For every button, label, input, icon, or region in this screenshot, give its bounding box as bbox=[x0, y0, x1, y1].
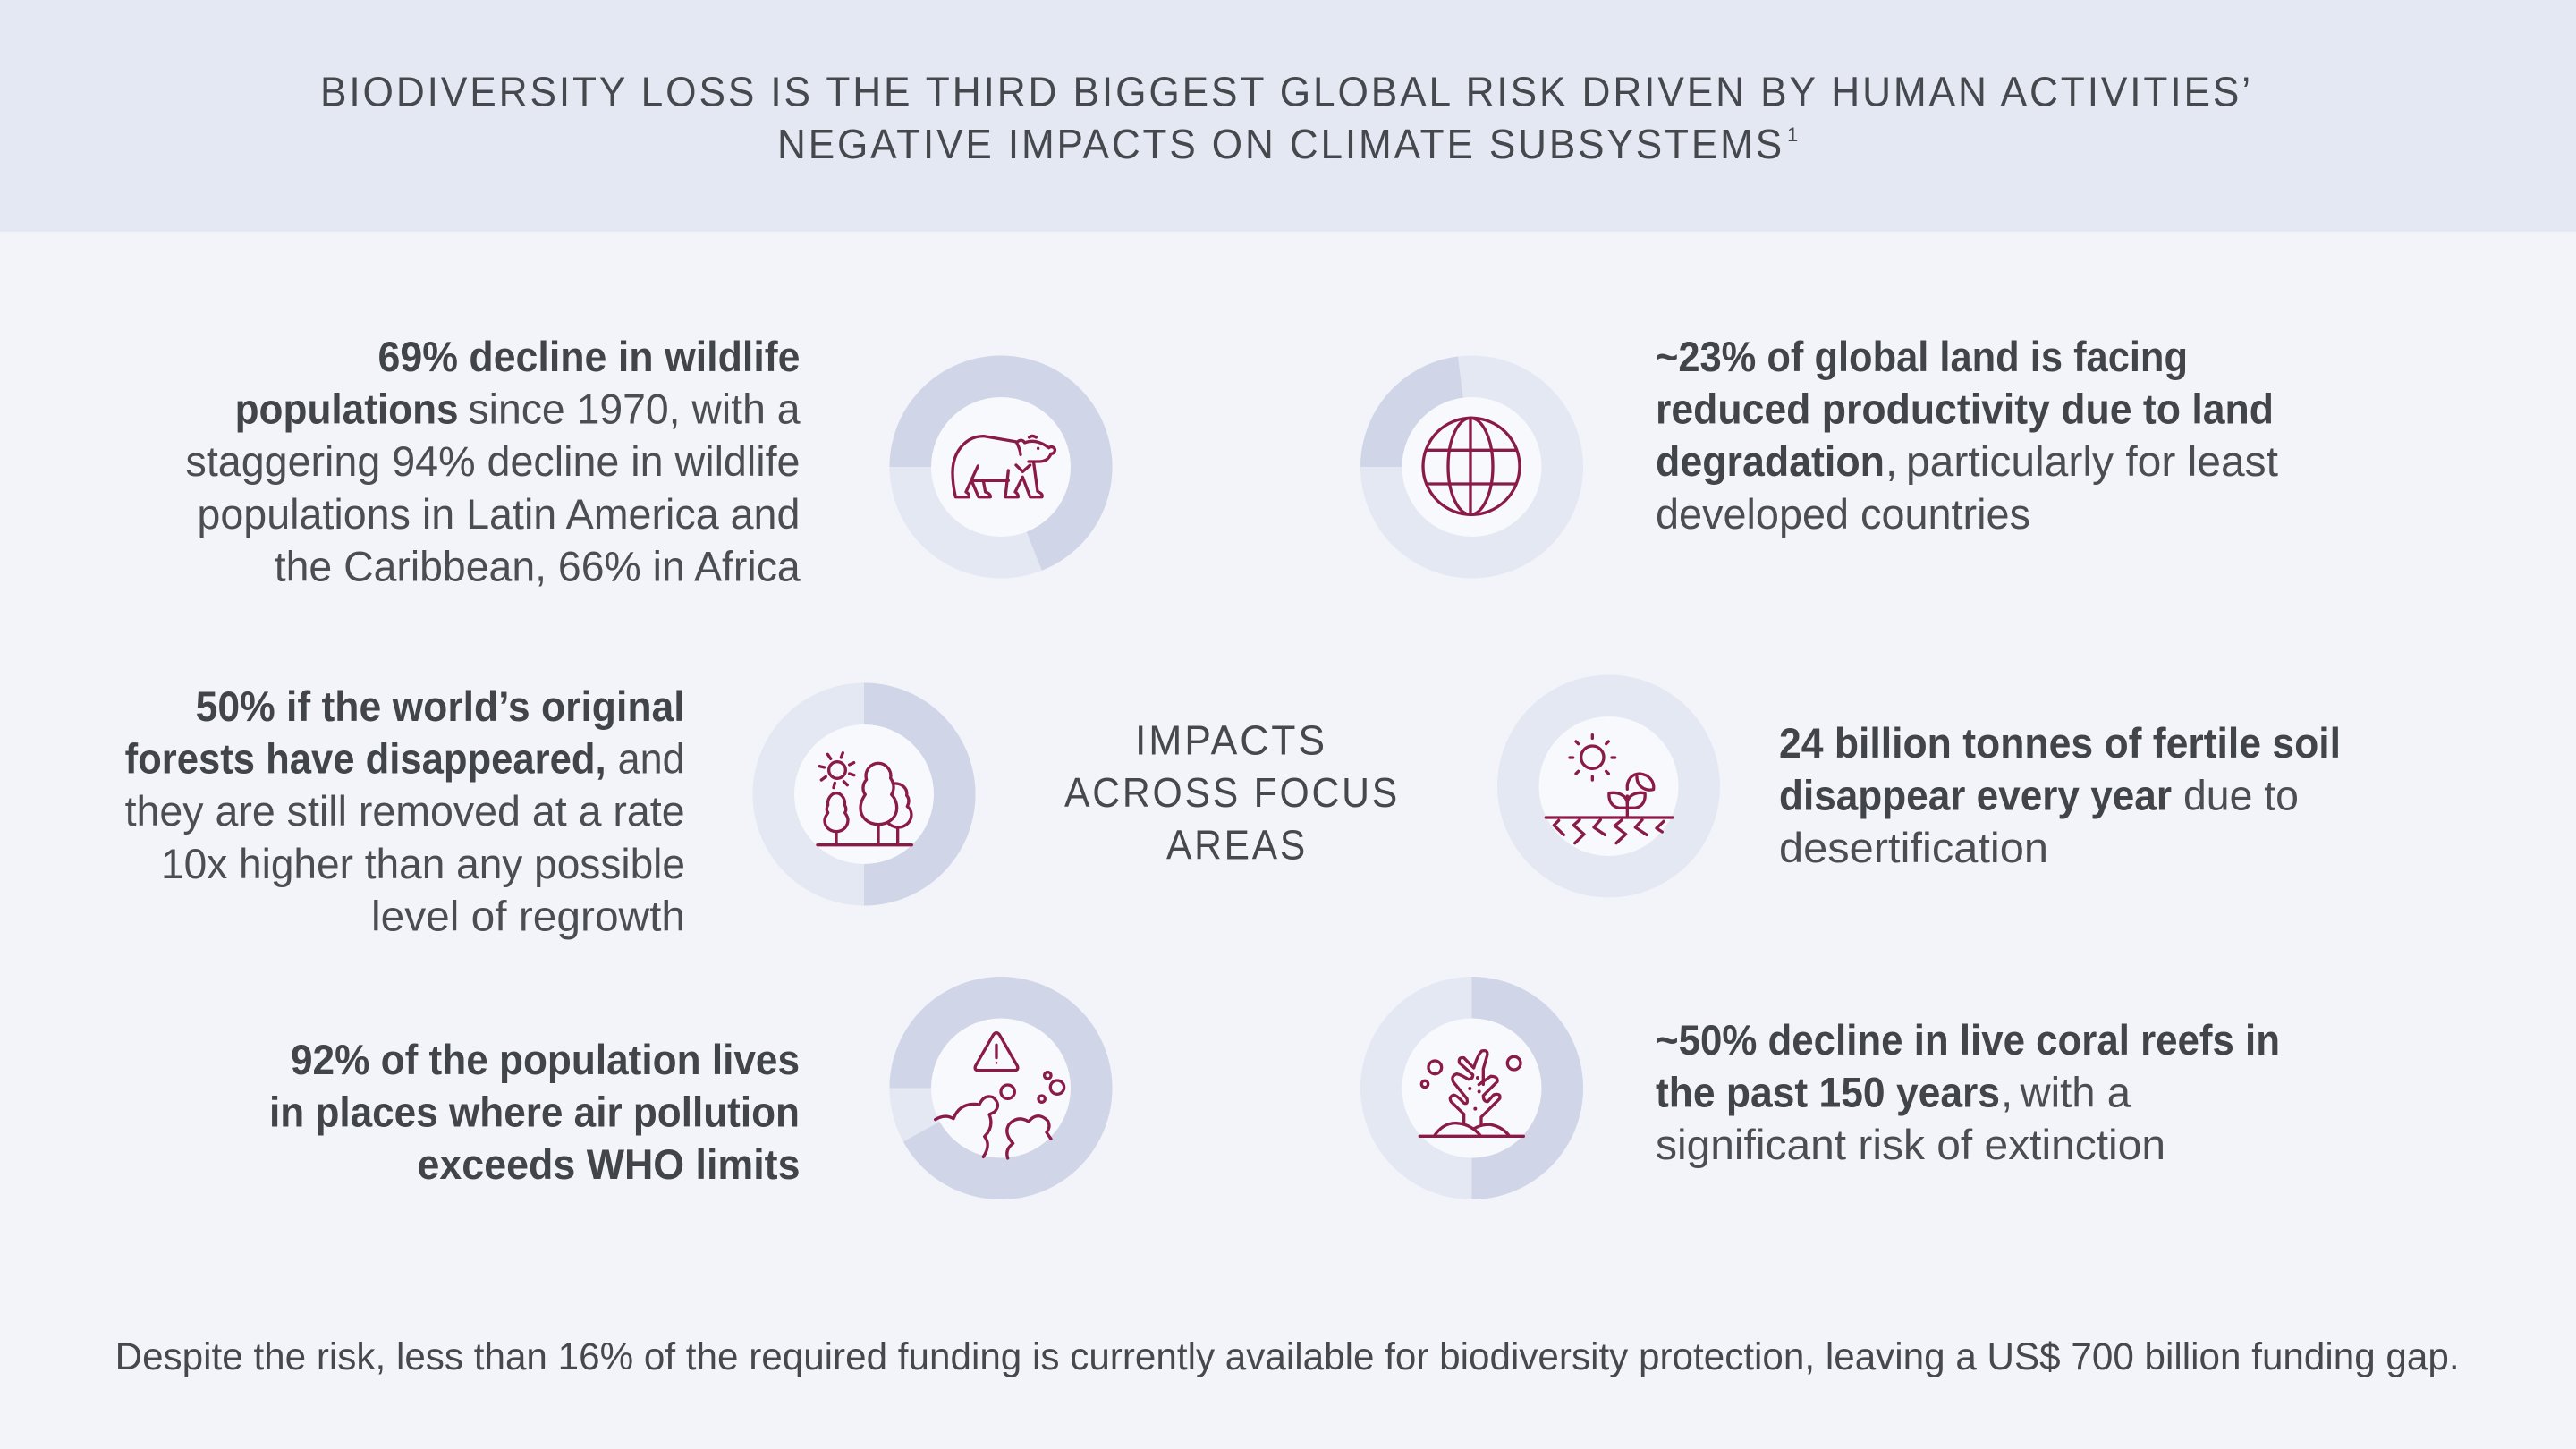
text: coral reefs: ~50% decline in live coral reefs in bbox=[1656, 1017, 2280, 1064]
text: forests: 50% if the world’s original bbox=[196, 683, 685, 731]
center label bbox=[1064, 717, 1400, 868]
icon: trees and sun bbox=[818, 753, 911, 845]
panel: forests bbox=[125, 683, 976, 940]
text: soil: disappear every year bbox=[1779, 773, 2172, 820]
donut: 23 percent bbox=[1360, 356, 1583, 578]
text: wildlife decline bbox=[186, 334, 801, 590]
center label: IMPACTS bbox=[1135, 717, 1327, 764]
icon: sun and sprout on cracked soil bbox=[1546, 735, 1673, 843]
text: wildlife decline: populations in Latin America and bbox=[197, 491, 800, 538]
panel: soil bbox=[1497, 674, 2341, 898]
panel: wildlife decline bbox=[186, 334, 1113, 590]
icon: warning and smog bbox=[936, 1033, 1064, 1158]
text: wildlife decline: populations bbox=[235, 386, 459, 434]
icon: globe bbox=[1423, 418, 1520, 514]
text: land degradation: developed countries bbox=[1656, 491, 2030, 538]
text: land degradation bbox=[1656, 334, 2278, 538]
donut: 92 percent bbox=[889, 977, 1113, 1199]
text: forests: forests have disappeared, bbox=[125, 736, 606, 784]
text: soil: due to bbox=[2183, 773, 2299, 820]
text: forests: they are still removed at a rate bbox=[125, 788, 685, 835]
text: coral reefs: , bbox=[2001, 1070, 2012, 1116]
text: wildlife decline: 69% decline in wildlife bbox=[377, 334, 800, 381]
center label: AREAS bbox=[1166, 821, 1308, 868]
donut: 69 percent bbox=[889, 356, 1113, 578]
text: land degradation: particularly for least bbox=[1906, 438, 2278, 486]
text: air pollution: 92% of the population lives bbox=[291, 1037, 800, 1084]
panel: air pollution bbox=[269, 977, 1113, 1199]
text: coral reefs: with a bbox=[2020, 1070, 2131, 1116]
header band bbox=[0, 0, 2576, 232]
donut: 50 percent forests bbox=[753, 683, 975, 905]
text: soil: 24 billion tonnes of fertile soil bbox=[1779, 720, 2341, 767]
text: coral reefs bbox=[1656, 1017, 2280, 1169]
text: air pollution: in places where air pollution bbox=[269, 1089, 800, 1137]
text: coral reefs: the past 150 years bbox=[1656, 1070, 2000, 1116]
center label: ACROSS FOCUS bbox=[1064, 769, 1400, 816]
title bbox=[320, 68, 2253, 167]
text: wildlife decline: since 1970, with a bbox=[469, 386, 801, 434]
footer note: Despite the risk, less than 16% of the required funding is currently available for biodiversity protection, leaving a US$ 700 billion funding gap. bbox=[115, 1335, 2460, 1378]
icon: coral bbox=[1419, 1051, 1523, 1136]
text: air pollution bbox=[269, 1037, 800, 1189]
text: soil: desertification bbox=[1779, 825, 2048, 872]
text: coral reefs: significant risk of extinction bbox=[1656, 1122, 2165, 1169]
text: soil bbox=[1779, 720, 2341, 872]
icon: bear bbox=[953, 436, 1055, 497]
title: 1 bbox=[1787, 123, 1798, 146]
text: forests: 10x higher than any possible bbox=[161, 841, 685, 888]
title: BIODIVERSITY LOSS IS THE THIRD BIGGEST GLOBAL RISK DRIVEN BY HUMAN ACTIVITIES’ bbox=[320, 68, 2253, 114]
title: NEGATIVE IMPACTS ON CLIMATE SUBSYSTEMS bbox=[777, 121, 1784, 167]
text: forests: and bbox=[618, 736, 685, 784]
panel: coral reefs bbox=[1360, 977, 2280, 1199]
text: forests: level of regrowth bbox=[371, 893, 685, 940]
text: air pollution: exceeds WHO limits bbox=[417, 1141, 800, 1189]
donut: 50 percent coral bbox=[1360, 977, 1583, 1199]
text: land degradation: ~23% of global land is facing bbox=[1656, 334, 2188, 381]
text: wildlife decline: the Caribbean, 66% in Africa bbox=[275, 543, 801, 590]
panel: land degradation bbox=[1360, 334, 2278, 578]
text: wildlife decline: staggering 94% decline in wildlife bbox=[186, 438, 800, 486]
text: forests bbox=[125, 683, 685, 940]
text: land degradation: , bbox=[1885, 438, 1897, 486]
text: land degradation: reduced productivity due to land bbox=[1656, 386, 2274, 434]
text: land degradation: degradation bbox=[1656, 438, 1885, 486]
donut: soil bbox=[1497, 674, 1720, 898]
